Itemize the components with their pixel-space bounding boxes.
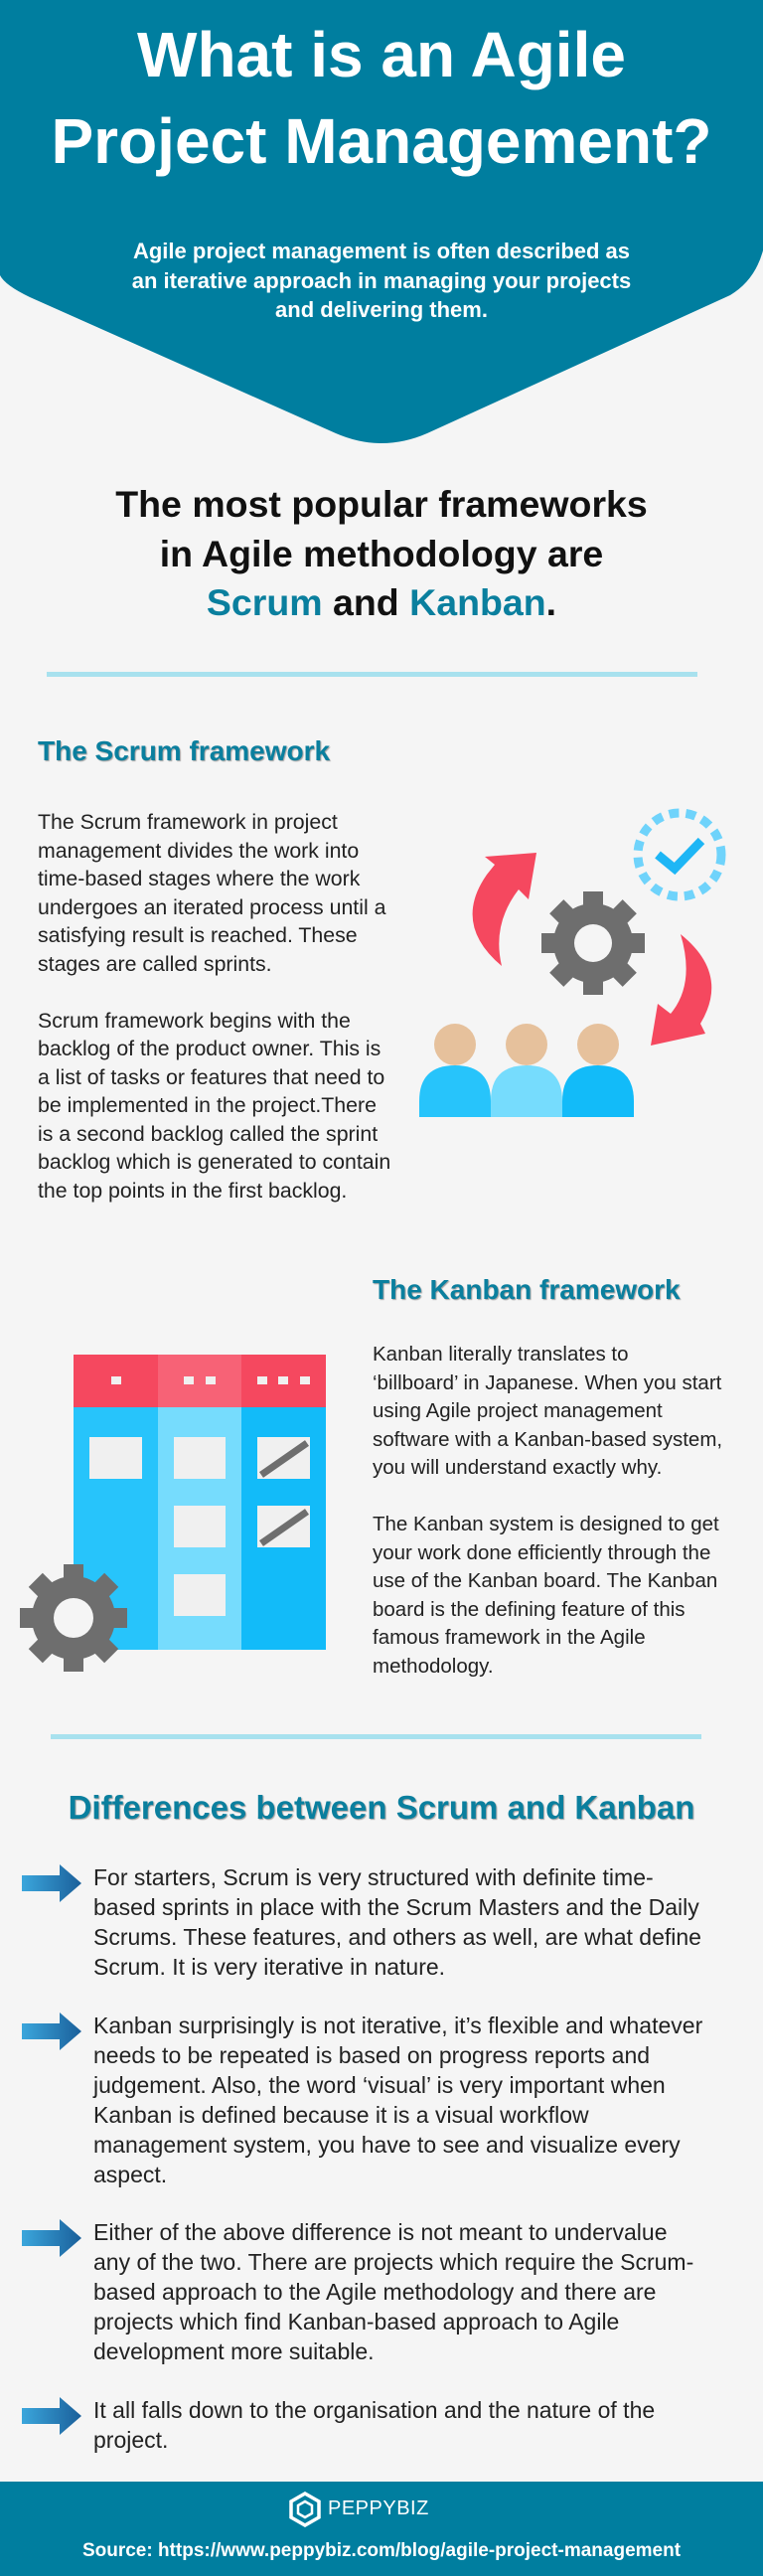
heading: kanban: The Kanban framework bbox=[373, 1274, 681, 1305]
icon: kanban board bbox=[20, 1355, 326, 1672]
text: For starters, Scrum is very structured with definite time- bbox=[93, 1864, 654, 1890]
bullet 3 bbox=[22, 2219, 693, 2364]
text: needs to be repeated is based on progress reports and bbox=[93, 2042, 650, 2068]
icon: arrow bbox=[22, 2397, 81, 2435]
text: scrum: The Scrum framework in project bbox=[38, 810, 338, 834]
text: projects which find Kanban-based approach to Agile bbox=[93, 2309, 619, 2334]
text: Kanban surprisingly is not iterative, it’s flexible and whatever bbox=[93, 2012, 702, 2038]
text: kanban: board is the defining feature of this bbox=[373, 1598, 686, 1620]
text: any of the two. There are projects which require the Scrum- bbox=[93, 2249, 693, 2275]
text: scrum: stages are called sprints. bbox=[38, 952, 272, 976]
source: Source: https://www.peppybiz.com/blog/agile-project-management bbox=[82, 2540, 681, 2561]
text: kanban: ‘billboard’ in Japanese. When you start bbox=[373, 1371, 721, 1393]
text: Kanban is defined because it is a visual workflow bbox=[93, 2102, 589, 2128]
text: kanban: The Kanban system is designed to get bbox=[373, 1513, 719, 1535]
text: scrum: Scrum framework begins with the bbox=[38, 1008, 351, 1032]
icon: arrow bbox=[22, 1864, 81, 1902]
subtitle: Agile project management is often described as bbox=[133, 239, 630, 263]
text: kanban bbox=[373, 1343, 722, 1678]
text: kanban: using Agile project management bbox=[373, 1399, 663, 1422]
text: kanban: you will understand exactly why. bbox=[373, 1456, 662, 1479]
text: scrum bbox=[38, 810, 390, 1203]
text: scrum: the top points in the first backlog. bbox=[38, 1179, 347, 1203]
text: Scrum. It is very iterative in nature. bbox=[93, 1954, 445, 1980]
text: kanban: methodology. bbox=[373, 1654, 494, 1678]
text: It all falls down to the organisation and the nature of the bbox=[93, 2397, 655, 2423]
text bbox=[93, 1864, 701, 1980]
text: scrum: be implemented in the project.There bbox=[38, 1093, 377, 1117]
icon: arrow up bbox=[473, 853, 536, 966]
icon: gear small bbox=[20, 1564, 127, 1672]
title bbox=[51, 19, 712, 177]
text: kanban: use of the Kanban board. The Kanban bbox=[373, 1569, 717, 1592]
text: scrum: is a second backlog called the sprint bbox=[38, 1121, 378, 1145]
text: scrum: undergoes an iterated process until a bbox=[38, 894, 385, 918]
icon: arrow down bbox=[651, 934, 711, 1046]
footer bbox=[0, 2482, 763, 2576]
icon: arrow bbox=[22, 2012, 81, 2050]
text: scrum: backlog of the product owner. This is bbox=[38, 1037, 381, 1060]
heading: differences: Differences between Scrum and Kanban bbox=[69, 1789, 694, 1826]
subtitle: an iterative approach in managing your projects bbox=[132, 268, 631, 292]
text: based sprints in place with the Scrum Masters and the Daily bbox=[93, 1894, 699, 1920]
text: based approach to the Agile methodology and there are bbox=[93, 2279, 656, 2305]
intro statement: Scrum and Kanban. bbox=[207, 581, 556, 623]
bullet 1 bbox=[22, 1864, 701, 1980]
text: judgement. Also, the word ‘visual’ is very important when bbox=[93, 2072, 666, 2098]
logo: PEPPYBIZ bbox=[328, 2497, 429, 2519]
subtitle: and delivering them. bbox=[275, 297, 488, 322]
text: management system, you have to see and visualize every bbox=[93, 2132, 681, 2158]
logo bbox=[289, 2492, 429, 2527]
text: Scrums. These features, and others as well, are what define bbox=[93, 1924, 701, 1950]
text: kanban: Kanban literally translates to bbox=[373, 1343, 629, 1366]
bullet 4 bbox=[22, 2397, 655, 2453]
text: scrum: time-based stages where the work bbox=[38, 867, 360, 890]
intro statement: The most popular frameworks bbox=[115, 483, 648, 525]
text: aspect. bbox=[93, 2162, 167, 2187]
header background shape bbox=[0, 0, 763, 443]
icon: scrum cycle bbox=[419, 809, 725, 1117]
text: Either of the above difference is not meant to undervalue bbox=[93, 2219, 668, 2245]
icon: people bbox=[419, 1024, 634, 1117]
text: scrum: management divides the work into bbox=[38, 839, 359, 863]
text: scrum: a list of tasks or features that need to bbox=[38, 1065, 384, 1089]
intro statement: in Agile methodology are bbox=[160, 533, 603, 574]
subtitle bbox=[132, 239, 631, 322]
text: kanban: famous framework in the Agile bbox=[373, 1626, 646, 1649]
text: kanban: your work done efficiently through the bbox=[373, 1540, 710, 1564]
title: What is an Agile bbox=[137, 19, 626, 90]
text: scrum: backlog which is generated to contain bbox=[38, 1150, 390, 1174]
text bbox=[93, 2219, 693, 2364]
icon: arrow bbox=[22, 2219, 81, 2257]
text: development more suitable. bbox=[93, 2338, 375, 2364]
text: scrum: satisfying result is reached. These bbox=[38, 923, 358, 947]
intro statement bbox=[115, 483, 648, 623]
text: project. bbox=[93, 2427, 168, 2453]
text bbox=[92, 2012, 702, 2187]
text bbox=[93, 2397, 655, 2453]
heading: scrum: The Scrum framework bbox=[38, 735, 330, 766]
text: kanban: software with a Kanban-based system, bbox=[373, 1427, 722, 1451]
icon: check circle bbox=[638, 813, 721, 896]
icon: gear bbox=[541, 891, 645, 995]
title: Project Management? bbox=[51, 105, 712, 177]
bullet 2 bbox=[22, 2012, 702, 2187]
